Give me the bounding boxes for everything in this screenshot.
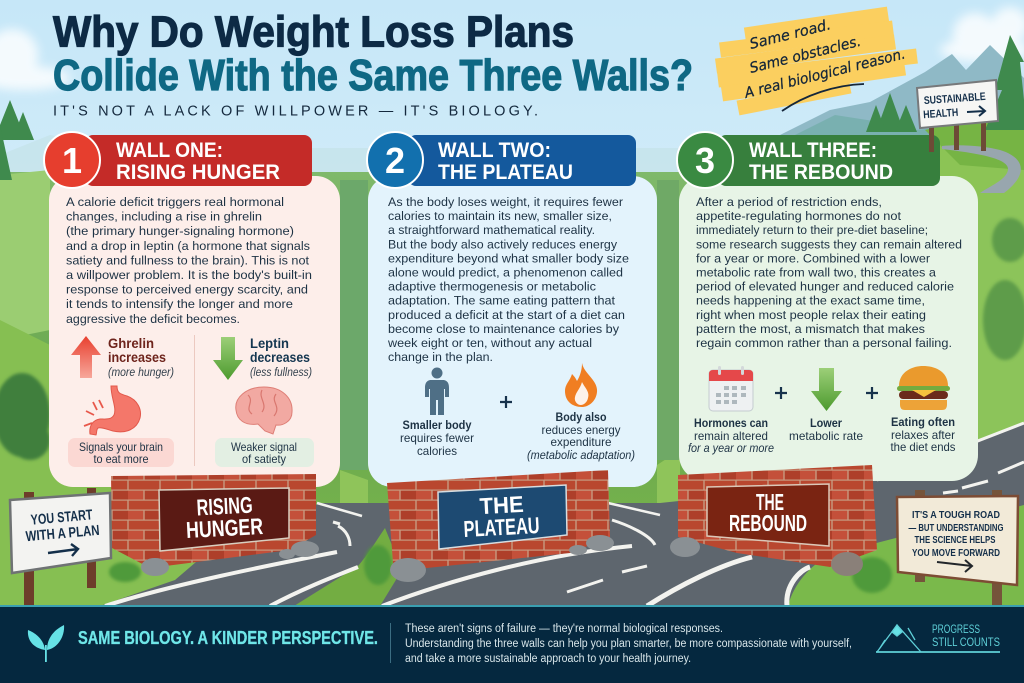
body text two: become close to maintenance calories by <box>388 322 620 336</box>
callout: weaker signal <box>215 438 314 467</box>
icon: green down arrow <box>811 368 842 411</box>
body text one: satiety and fullness to the brain). This is not <box>66 253 310 267</box>
caption: lower metabolic rate: Lower <box>810 417 842 430</box>
body text three: metabolic rate from wall two, this creates a <box>696 266 936 280</box>
caption: hormones: Hormones can <box>694 417 768 430</box>
icon: leaf sprout <box>28 625 64 662</box>
ghrelin label <box>108 335 174 379</box>
sign: you start with a plan: YOU START <box>30 507 93 529</box>
progress label: PROGRESS <box>932 624 980 636</box>
body text two: adaptive thermogenesis or metabolic <box>388 280 596 294</box>
body text three: regain common rather than a personal failing. <box>696 336 952 350</box>
icon: burger <box>897 366 950 410</box>
panel: wall one <box>44 132 340 487</box>
wall: rising hunger: HUNGER <box>185 513 264 543</box>
callout: signals your brain <box>68 438 174 467</box>
caption: eating often: the diet ends <box>890 441 956 454</box>
body text three <box>696 195 962 350</box>
body text one: and a drop in leptin (a hormone that signals <box>66 239 310 253</box>
title <box>53 8 693 100</box>
sign: you start with a plan: WITH A PLAN <box>25 523 100 545</box>
body text three: pattern the most, a mismatch that makes <box>696 322 925 336</box>
icon: green down arrow <box>213 337 243 380</box>
caption: eating often: Eating often <box>891 416 955 429</box>
wall: the rebound: THE <box>756 489 784 515</box>
callout: signals your brain: to eat more <box>94 453 148 466</box>
body text two: alone would predict, a phenomenon called <box>388 266 623 280</box>
footer headline: SAME BIOLOGY. A KINDER PERSPECTIVE. <box>78 627 378 648</box>
divider <box>194 335 196 466</box>
caption: hormones <box>688 417 775 455</box>
header ribbon three <box>677 132 940 188</box>
caption: smaller body: calories <box>417 445 457 458</box>
panel: wall two <box>367 132 657 487</box>
header ribbon two: WALL TWO: <box>438 138 551 162</box>
body text two: change in the plan. <box>388 350 493 364</box>
progress label: STILL COUNTS <box>932 637 1000 649</box>
title: Why Do Weight Loss Plans <box>53 8 574 56</box>
body text three: right when most people relax their eating <box>696 308 926 322</box>
body text two: produced a deficit at the start of a diet can <box>388 308 625 322</box>
body text one: it tends to intensify the longer and more <box>66 297 293 311</box>
body text two: As the body loses weight, it requires fewer <box>388 195 623 209</box>
icon: mountain outline <box>876 625 1000 652</box>
header ribbon three: WALL THREE: <box>749 138 877 162</box>
body text one: A calorie deficit triggers real hormonal <box>66 195 284 209</box>
caption: body also: reduces energy <box>542 424 621 437</box>
header ribbon three: THE REBOUND <box>749 160 893 184</box>
icon: flame <box>565 363 597 407</box>
sign: you start with a plan <box>10 488 111 605</box>
sign: sustainable health <box>917 80 998 152</box>
caption: smaller body: requires fewer <box>400 432 474 445</box>
callout: yellow brush note: A real biological reason. <box>742 46 907 102</box>
body text one: response to perceived energy scarcity, and <box>66 283 308 297</box>
title: Collide With the Same Three Walls? <box>53 51 693 100</box>
icon: calendar <box>709 366 753 411</box>
callout: weaker signal: Weaker signal <box>231 441 297 454</box>
wall: the rebound: REBOUND <box>729 510 807 536</box>
header ribbon three: 3 <box>695 140 715 181</box>
caption: smaller body <box>400 419 474 458</box>
body text one: a willpower problem. It is the body's built-in <box>66 268 312 282</box>
caption: eating often: relaxes after <box>891 429 955 442</box>
body text two: adaptation. The same eating pattern that <box>388 294 616 308</box>
header ribbon two: THE PLATEAU <box>438 160 573 184</box>
caption: lower metabolic rate: metabolic rate <box>789 430 863 443</box>
header ribbon two: 2 <box>385 140 405 181</box>
leptin label: Leptin <box>250 335 289 351</box>
bushes by the walls <box>109 545 892 593</box>
ghrelin label: increases <box>108 349 166 365</box>
header ribbon two <box>367 132 636 188</box>
body text three: for a year or more. Combined with a lower <box>696 251 930 265</box>
sign: tough road <box>897 490 1018 606</box>
footer band <box>0 605 1024 683</box>
footer text <box>405 623 852 665</box>
callout: weaker signal: of satiety <box>242 453 286 466</box>
header ribbon one <box>44 132 312 188</box>
wall: the rebound <box>670 465 877 576</box>
leptin label <box>250 335 312 379</box>
body text two: a straightforward mathematical reality. <box>388 223 595 237</box>
body text two: week eight or ten, without any actual <box>387 336 592 350</box>
footer text: Understanding the three walls can help you plan smarter, be more compassionate with yourself, <box>405 638 852 650</box>
body text two: But the body also actively reduces energy <box>388 237 618 251</box>
caption: body also: (metabolic adaptation) <box>527 449 635 462</box>
progress label <box>932 624 1000 649</box>
caption: lower metabolic rate <box>789 417 863 443</box>
callout: yellow brush note: Same road. <box>748 17 833 53</box>
caption: eating often <box>890 416 956 454</box>
sign: sustainable health: HEALTH <box>923 107 959 121</box>
icon: brain <box>236 387 292 434</box>
caption: body also <box>527 411 635 462</box>
road <box>100 423 1024 606</box>
wall: rising hunger: RISING <box>196 492 253 520</box>
sign: tough road: IT'S A TOUGH ROAD <box>912 509 1000 521</box>
wall: rising hunger <box>111 474 319 576</box>
leptin label: decreases <box>250 349 310 365</box>
subtitle: IT'S NOT A LACK OF WILLPOWER — IT'S BIOLOGY. <box>53 104 538 120</box>
body text two <box>387 195 629 364</box>
wall: the plateau: THE <box>479 491 524 519</box>
plus sign <box>866 387 878 399</box>
icon: person <box>425 368 449 415</box>
plus sign <box>500 396 512 408</box>
footer divider <box>390 623 392 663</box>
header ribbon one: RISING HUNGER <box>116 160 280 184</box>
body text three: needs happening at the exact same time, <box>696 294 925 308</box>
panel: wall three <box>677 132 978 481</box>
sign: tough road: THE SCIENCE HELPS <box>914 534 996 546</box>
icon: red up arrow <box>71 336 101 378</box>
body text three: immediately return to their pre-diet baseline; <box>696 223 928 237</box>
trees <box>0 35 1024 180</box>
icon: stomach <box>84 386 140 435</box>
footer text: and take a more sustainable approach to your health journey. <box>405 653 691 665</box>
footer text: These aren't signs of failure — they're normal biological responses. <box>405 623 723 635</box>
callout: yellow brush note: Same obstacles. <box>748 34 863 77</box>
leptin label: (less fullness) <box>250 367 312 379</box>
body text one: (the primary hunger-signaling hormone) <box>66 224 294 238</box>
body text one: changes, including a rise in ghrelin <box>66 210 262 224</box>
sign: tough road: YOU MOVE FORWARD <box>912 547 1000 559</box>
body text three: some research suggests they can remain altered <box>696 237 962 251</box>
body text two: calories to maintain its new, smaller size, <box>388 209 612 223</box>
caption: smaller body: Smaller body <box>402 419 472 432</box>
header ribbon one: 1 <box>62 140 82 181</box>
caption: body also: Body also <box>556 411 606 424</box>
callout: signals your brain: Signals your brain <box>79 441 163 454</box>
body text three: period of elevated hunger and reduced calorie <box>696 280 954 294</box>
caption: hormones: remain altered <box>694 430 768 443</box>
wall: the plateau <box>387 470 614 582</box>
body text one: aggressive the deficit becomes. <box>66 312 240 326</box>
caption: body also: expenditure <box>550 436 612 449</box>
header ribbon one: WALL ONE: <box>116 138 223 162</box>
callout: yellow brush note <box>716 14 917 111</box>
caption: hormones: for a year or more <box>688 442 775 455</box>
plus sign <box>775 387 787 399</box>
ghrelin label: Ghrelin <box>108 335 154 351</box>
body text three: appetite-regulating hormones do not <box>696 209 902 223</box>
body text two: expenditure beyond what smaller body size <box>388 251 629 265</box>
sign: sustainable health: SUSTAINABLE <box>923 91 986 107</box>
wall: the plateau: PLATEAU <box>463 512 540 542</box>
ghrelin label: (more hunger) <box>108 367 174 379</box>
body text one <box>66 195 312 326</box>
body text three: After a period of restriction ends, <box>696 195 882 209</box>
